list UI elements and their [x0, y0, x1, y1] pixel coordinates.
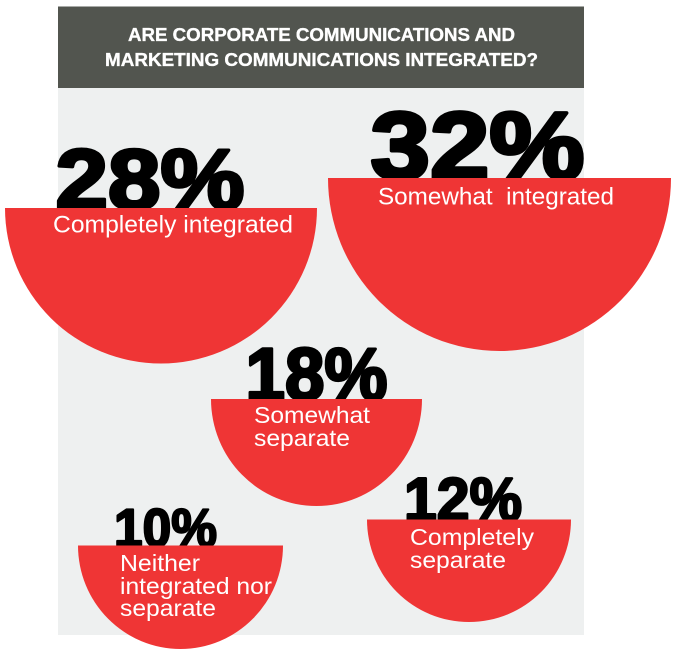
stat: 10% neither integrated nor separate: Neither	[120, 550, 200, 576]
stat: 12% completely separate	[367, 466, 571, 622]
stat: 12% completely separate: separate	[410, 547, 506, 573]
stat: 18% somewhat separate: Somewhat	[254, 402, 370, 428]
stat: 18% somewhat separate	[211, 333, 422, 506]
stat: 32% somewhat integrated: 32%	[370, 93, 584, 200]
stat: 28% completely integrated	[5, 133, 317, 364]
stat: 28% completely integrated: Completely integrated	[53, 212, 293, 238]
stat: 10% neither integrated nor separate: integrated nor	[120, 573, 272, 599]
stat: 18% somewhat separate: 18%	[246, 333, 388, 416]
stat: 10% neither integrated nor separate: 10%	[114, 498, 217, 558]
stat: 18% somewhat separate: separate	[254, 425, 350, 451]
title banner: MARKETING COMMUNICATIONS INTEGRATED?	[105, 50, 538, 70]
title banner	[58, 6, 584, 88]
stat: 32% somewhat integrated: Somewhat integrated	[378, 184, 614, 210]
stat: 10% neither integrated nor separate	[78, 498, 283, 649]
title banner: ARE CORPORATE COMMUNICATIONS AND	[128, 25, 515, 45]
stat: 28% completely integrated: 28%	[56, 133, 244, 228]
stat: 32% somewhat integrated	[328, 93, 671, 351]
stat: 10% neither integrated nor separate: separate	[120, 595, 216, 621]
stat: 12% completely separate: Completely	[410, 524, 534, 550]
stat: 12% completely separate: 12%	[404, 466, 522, 534]
background panel	[58, 88, 584, 635]
